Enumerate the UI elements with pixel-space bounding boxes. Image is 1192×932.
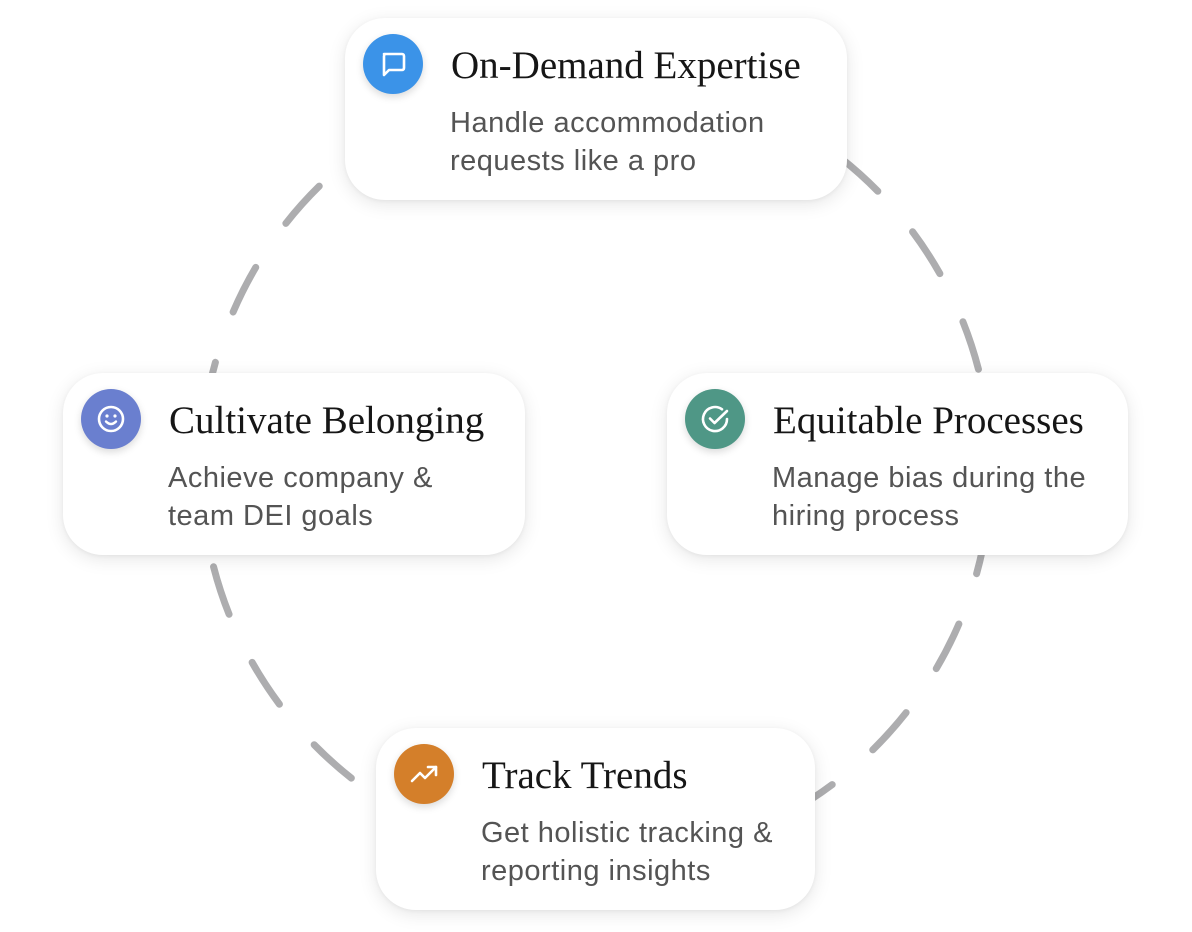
heading: Cultivate Belonging bbox=[169, 399, 484, 442]
panel: Track Trends bbox=[376, 728, 815, 910]
text block: hiring process bbox=[772, 500, 960, 532]
text block: Manage bias during the bbox=[772, 462, 1086, 494]
text block: team DEI goals bbox=[168, 500, 373, 532]
panel: On-Demand Expertise bbox=[345, 18, 847, 200]
panel: Cultivate Belonging bbox=[63, 373, 525, 555]
text block: Get holistic tracking & bbox=[481, 817, 773, 849]
text block bbox=[450, 107, 765, 177]
text block bbox=[168, 462, 433, 532]
heading: Track Trends bbox=[482, 754, 688, 797]
text block bbox=[481, 817, 773, 887]
icon: trend arrow bbox=[394, 744, 454, 804]
text block: Handle accommodation bbox=[450, 107, 765, 139]
heading: On-Demand Expertise bbox=[451, 44, 801, 87]
text block: reporting insights bbox=[481, 855, 711, 887]
icon: check circle bbox=[685, 389, 745, 449]
text block: requests like a pro bbox=[450, 145, 696, 177]
icon: chat bubble bbox=[363, 34, 423, 94]
panel: Equitable Processes bbox=[667, 373, 1128, 555]
icon: smiley bbox=[81, 389, 141, 449]
text block bbox=[772, 462, 1086, 532]
heading: Equitable Processes bbox=[773, 399, 1084, 442]
text block: Achieve company & bbox=[168, 462, 433, 494]
